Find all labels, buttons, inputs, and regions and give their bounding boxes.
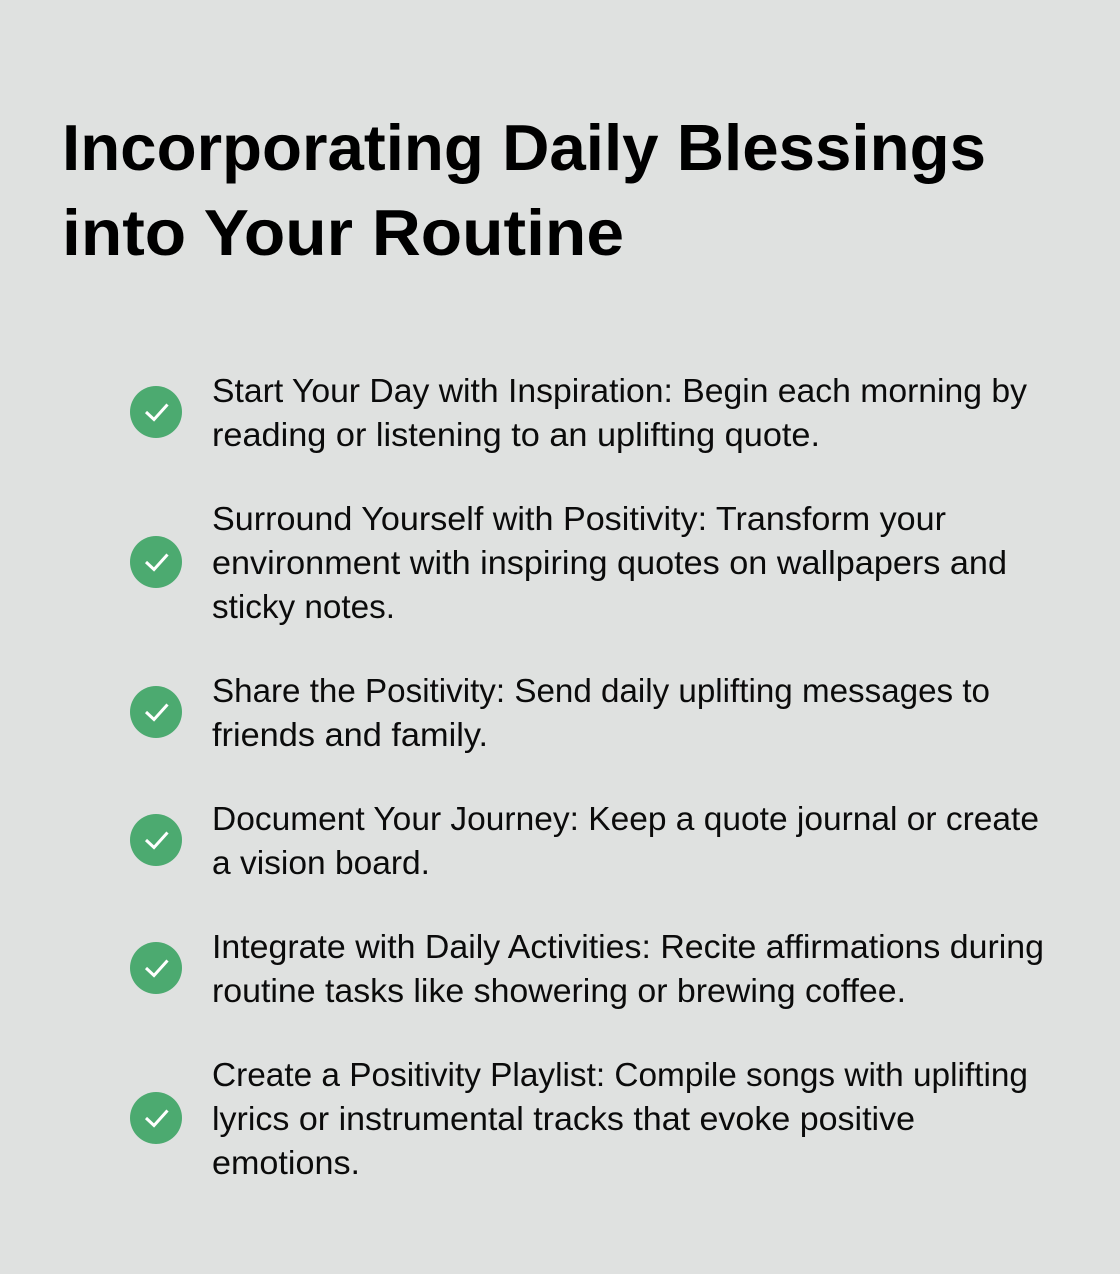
list item: document your journey [130,800,1039,881]
text: surround yourself: sticky notes. [212,588,395,625]
text: document your journey: Document Your Journey: Keep a quote journal or create [212,800,1039,837]
text: surround yourself: Surround Yourself with Positivity: Transform your [212,500,946,537]
text: positivity playlist: emotions. [212,1144,360,1181]
icon: check 3 [130,686,182,738]
list item: start your day [130,372,1028,453]
text: integrate with daily activities [212,928,1044,1009]
text: positivity playlist [212,1056,1028,1181]
text: positivity playlist: lyrics or instrumental tracks that evoke positive [212,1100,915,1137]
text: start your day [212,372,1028,453]
title: Incorporating Daily Blessings [62,111,986,184]
text: integrate with daily activities: routine tasks like showering or brewing coffee. [212,972,906,1009]
list item: share the positivity [130,672,990,753]
icon: check 4 [130,814,182,866]
text: integrate with daily activities: Integrate with Daily Activities: Recite affirmations during [212,928,1044,965]
text: start your day: Start Your Day with Inspiration: Begin each morning by [212,372,1028,409]
text: surround yourself [212,500,1007,625]
text: share the positivity: Share the Positivity: Send daily uplifting messages to [212,672,990,709]
list item: positivity playlist [130,1056,1028,1181]
checklist [130,372,1044,1181]
icon: check 2 [130,536,182,588]
title: into Your Routine [62,196,624,269]
icon: check 6 [130,1092,182,1144]
icon: check 1 [130,386,182,438]
text: start your day: reading or listening to an uplifting quote. [212,416,820,453]
title [62,111,986,269]
text: document your journey [212,800,1039,881]
text: positivity playlist: Create a Positivity Playlist: Compile songs with uplifting [212,1056,1028,1093]
text: share the positivity [212,672,990,753]
text: document your journey: a vision board. [212,844,430,881]
list item: integrate with daily activities [130,928,1044,1009]
icon: check 5 [130,942,182,994]
list item: surround yourself [130,500,1007,625]
text: share the positivity: friends and family. [212,716,488,753]
text: surround yourself: environment with inspiring quotes on wallpapers and [212,544,1007,581]
